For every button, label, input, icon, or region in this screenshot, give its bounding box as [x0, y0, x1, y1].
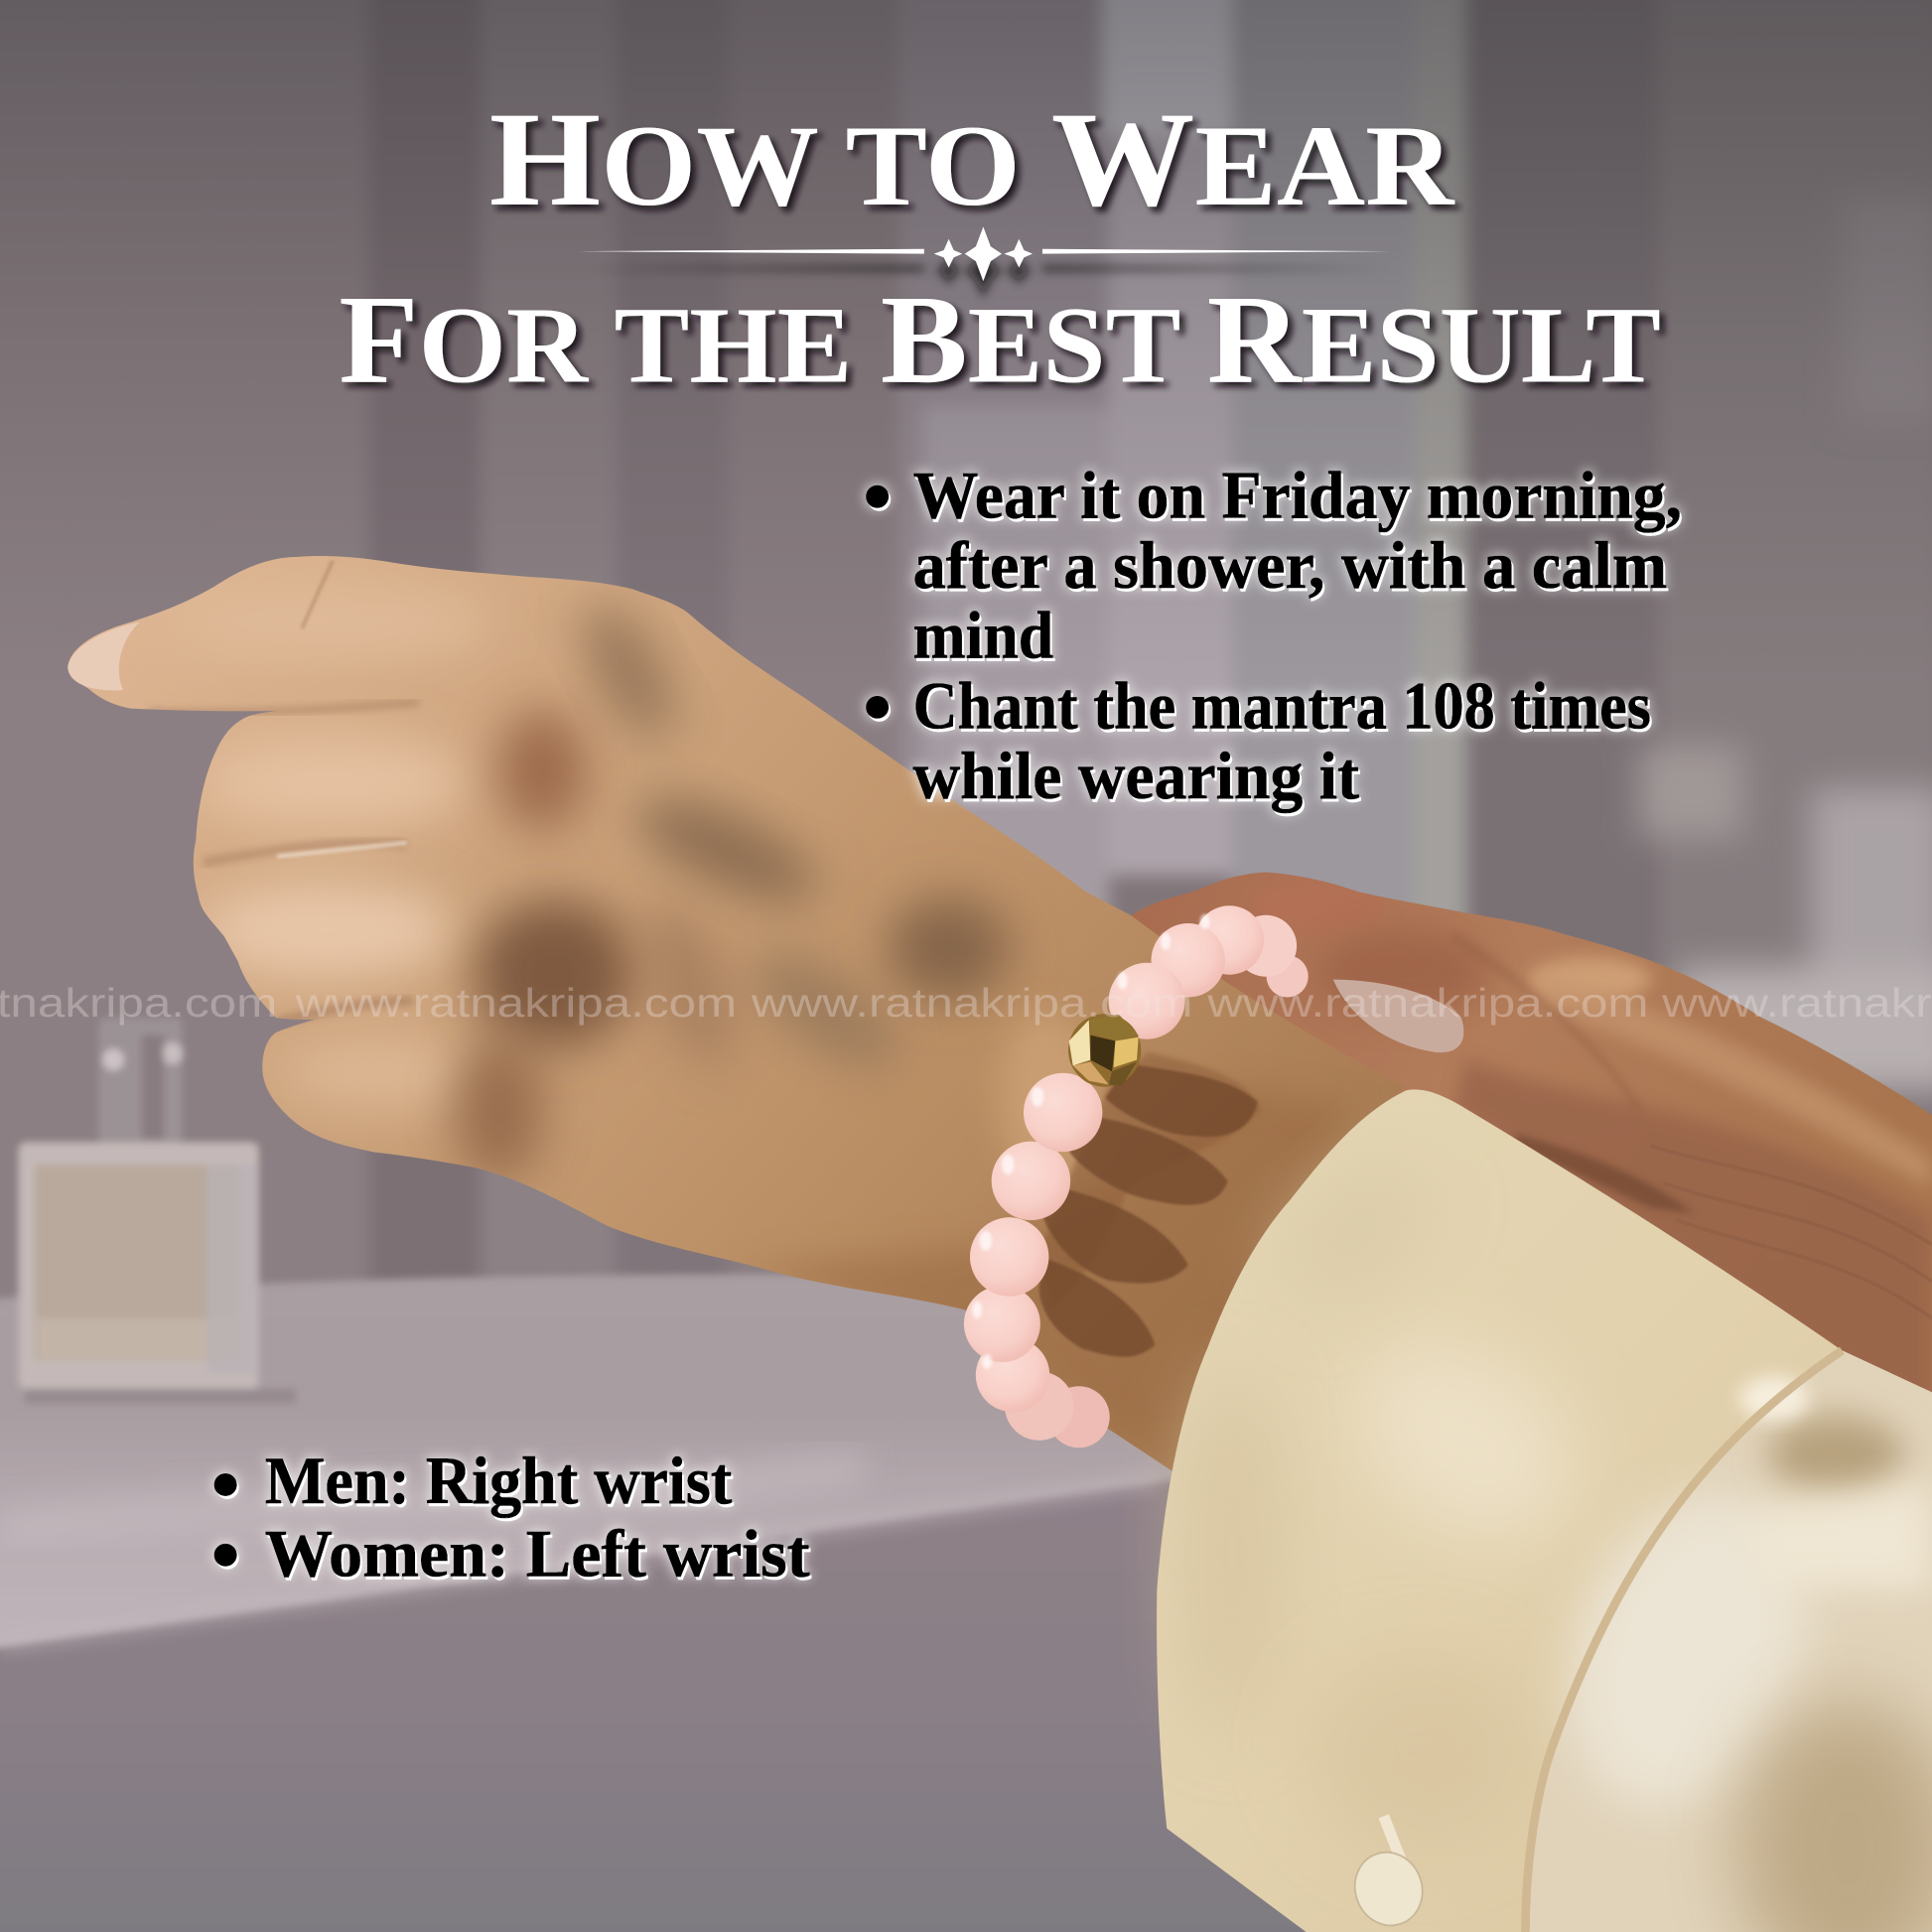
- ornamental divider: [577, 226, 1390, 281]
- watermark: www.ratnakripa.com: [0, 980, 1932, 1026]
- far-side beads: [1005, 915, 1309, 1448]
- bead highlights: [972, 914, 1210, 1369]
- title: HOW TO WEAR: [489, 83, 1455, 234]
- text block: ritual instructions: after a shower, with a calm: [913, 527, 1667, 603]
- main hand: [68, 556, 1405, 1478]
- text block: ritual instructions: Chant the mantra 108 times: [913, 667, 1651, 743]
- sleeve with cuff: [1157, 1089, 1932, 1932]
- text block: ritual instructions: [866, 457, 1682, 813]
- text block: which wrist: [214, 1443, 810, 1590]
- icon: sleeve button: [1344, 1816, 1433, 1932]
- watermark: www.ratnakripa.com: www.ratnakripa.com: [1206, 980, 1649, 1026]
- text block: which wrist: Women: Left wrist: [265, 1515, 810, 1590]
- watermark: www.ratnakripa.com: www.ratnakripa.com: [751, 980, 1192, 1026]
- text block: ritual instructions: while wearing it: [913, 738, 1359, 813]
- marble table: [0, 1275, 1355, 1932]
- cuff seam: [1525, 1350, 1842, 1932]
- text block: ritual instructions: mind: [913, 598, 1053, 673]
- icon: fingernail: [68, 622, 139, 690]
- near-side beads: [964, 905, 1264, 1412]
- perfume bottle: [19, 1018, 296, 1404]
- icon: gold faceted bead: [1068, 1014, 1141, 1087]
- icon: fingernail: [1333, 980, 1463, 1052]
- rolled sleeve panel: [1525, 1350, 1932, 1932]
- rose quartz bracelet: [964, 905, 1309, 1448]
- bracelet shadows on wrist: [1039, 1052, 1261, 1357]
- text block: which wrist: Men: Right wrist: [265, 1443, 732, 1518]
- text block: ritual instructions: Wear it on Friday morning,: [913, 457, 1682, 532]
- supporting hand: [1109, 873, 1932, 1417]
- watermark: www.ratnakripa.com: www.ratnakripa.com: [295, 980, 737, 1026]
- dark vignette at top: [0, 0, 1932, 690]
- subtitle: FOR THE BEST RESULT: [339, 269, 1661, 410]
